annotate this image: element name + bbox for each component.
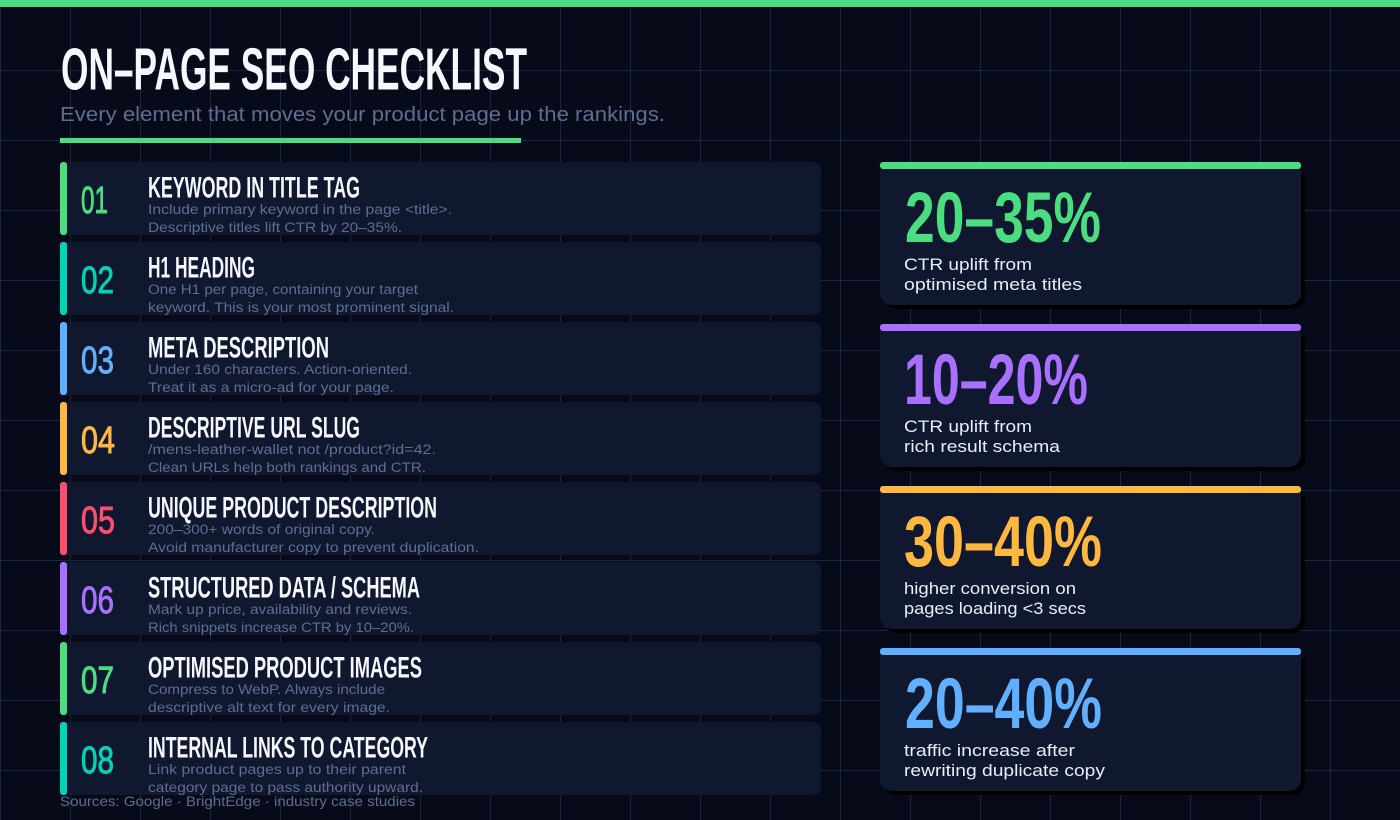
item 05: unique product description [60, 482, 821, 555]
item 06: structured data / schema [60, 562, 821, 635]
stat card: 20–40%: traffic increase after [904, 741, 1075, 760]
stat card: 10–20% [880, 324, 1305, 471]
item 01: keyword in title tag: Descriptive titles lift CTR by 20–35%. [148, 220, 402, 235]
item 02: h1 heading: keyword. This is your most prominent signal. [148, 300, 454, 315]
item 07: optimised product images [60, 642, 821, 715]
stat card: 10–20%: 10–20% [904, 341, 1088, 420]
stat card: 20–40% [880, 648, 1305, 795]
item 07: optimised product images: OPTIMISED PRODUCT IMAGES [148, 652, 422, 684]
item 07: optimised product images: Compress to WebP. Always include [148, 682, 385, 697]
item 08: internal links to category: category page to pass authority upward. [148, 780, 423, 795]
item 03: meta description: 03 [81, 340, 114, 382]
item 02: h1 heading [60, 242, 821, 315]
item 06: structured data / schema: Rich snippets increase CTR by 10–20%. [148, 620, 414, 635]
item 04: descriptive url slug [60, 402, 821, 475]
item 02: h1 heading: H1 HEADING [148, 252, 255, 284]
item 04: descriptive url slug: DESCRIPTIVE URL SLUG [148, 412, 360, 444]
item 01: keyword in title tag [60, 162, 821, 235]
stat card: 30–40%: pages loading <3 secs [904, 599, 1086, 618]
item 01: keyword in title tag: 01 [81, 180, 108, 222]
title underline [60, 138, 521, 143]
item 03: meta description: META DESCRIPTION [148, 332, 329, 364]
item 08: internal links to category [60, 722, 821, 795]
item 01: keyword in title tag: KEYWORD IN TITLE TAG [148, 172, 360, 204]
stat card: 20–35%: 20–35% [905, 179, 1101, 258]
stat card: 30–40% [880, 486, 1305, 633]
sources note: Sources: Google · BrightEdge · industry case studies [60, 793, 415, 809]
item 05: unique product description: 200–300+ words of original copy. [148, 522, 375, 537]
item 04: descriptive url slug: 04 [81, 420, 115, 462]
item 01: keyword in title tag: Include primary keyword in the page <title>. [148, 202, 452, 217]
item 04: descriptive url slug: /mens-leather-wallet not /product?id=42. [148, 442, 436, 457]
checklist panel [60, 162, 821, 795]
subtitle: Every element that moves your product page up the rankings. [60, 104, 665, 126]
stat card: 30–40%: 30–40% [904, 503, 1102, 582]
title: ON–PAGE SEO CHECKLIST [61, 36, 527, 102]
stat card: 10–20%: rich result schema [904, 437, 1061, 456]
item 03: meta description [60, 322, 821, 395]
item 02: h1 heading: One H1 per page, containing your target [148, 282, 418, 297]
item 08: internal links to category: 08 [81, 740, 114, 782]
stat card: 20–35%: optimised meta titles [904, 275, 1082, 294]
item 05: unique product description: Avoid manufacturer copy to prevent duplication. [148, 540, 479, 555]
item 07: optimised product images: descriptive alt text for every image. [148, 700, 390, 715]
stat card: 20–35%: CTR uplift from [904, 255, 1032, 274]
stat card: 20–40%: rewriting duplicate copy [904, 761, 1106, 780]
item 05: unique product description: 05 [81, 500, 115, 542]
stat card: 20–40%: 20–40% [905, 665, 1102, 744]
top accent bar [0, 0, 1400, 7]
stat card: 10–20%: CTR uplift from [904, 417, 1032, 436]
item 06: structured data / schema: Mark up price, availability and reviews. [148, 602, 412, 617]
item 08: internal links to category: Link product pages up to their parent [148, 762, 406, 777]
item 08: internal links to category: INTERNAL LINKS TO CATEGORY [148, 732, 428, 764]
item 05: unique product description: UNIQUE PRODUCT DESCRIPTION [148, 492, 437, 524]
item 03: meta description: Under 160 characters. Action-oriented. [148, 362, 412, 377]
item 07: optimised product images: 07 [81, 660, 114, 702]
item 02: h1 heading: 02 [81, 260, 114, 302]
stat card: 30–40%: higher conversion on [904, 579, 1076, 598]
item 06: structured data / schema: STRUCTURED DATA / SCHEMA [148, 572, 420, 604]
item 06: structured data / schema: 06 [81, 580, 114, 622]
stat cards panel [880, 162, 1305, 795]
stat card: 20–35% [880, 162, 1305, 309]
item 04: descriptive url slug: Clean URLs help both rankings and CTR. [148, 460, 426, 475]
item 03: meta description: Treat it as a micro-ad for your page. [148, 380, 394, 395]
